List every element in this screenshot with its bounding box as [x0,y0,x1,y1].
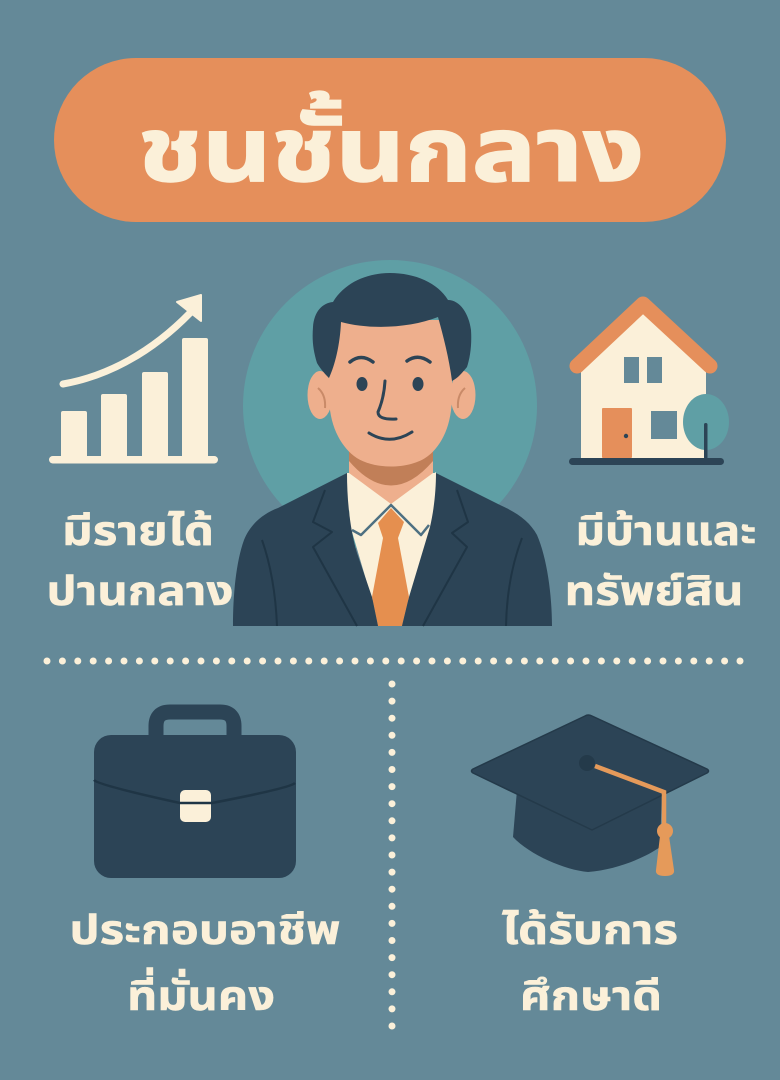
icon: briefcase [94,712,296,878]
icon: graduation cap [472,715,708,876]
title text: ชนชั้นกลาง [138,90,644,201]
icon: house [569,304,729,465]
label: good education [502,907,678,1019]
nose and mouth [369,381,412,439]
label: house and assets: มีบ้านและ [576,508,756,554]
vertical dotted divider [388,684,396,1026]
label: good education: ได้รับการ [502,907,678,953]
label: middle income [46,508,233,614]
hair [313,273,471,381]
brows [350,357,430,362]
label: stable occupation [70,907,340,1019]
label: good education: ศึกษาดี [520,973,662,1019]
teal circle backdrop [243,260,537,552]
label: house and assets: ทรัพย์สิน [564,568,744,614]
label: stable occupation: ประกอบอาชีพ [70,907,340,953]
lapels and sleeve lines [262,490,522,626]
label: middle income: ปานกลาง [46,568,233,614]
title banner [54,58,726,222]
ears [308,371,476,419]
shirt [347,472,436,600]
label: stable occupation: ที่มั่นคง [127,967,275,1019]
collar line [352,505,429,535]
face [329,320,452,466]
suit [233,473,552,626]
label: middle income: มีรายได้ [62,508,214,554]
neck [349,445,433,504]
portrait: middle-class man [233,260,552,626]
horizontal dotted divider [47,658,740,664]
icon: rising bar chart [49,295,218,464]
label: house and assets [564,508,756,614]
eyes [356,377,368,391]
neck shadow [349,450,433,486]
tie [372,508,409,626]
